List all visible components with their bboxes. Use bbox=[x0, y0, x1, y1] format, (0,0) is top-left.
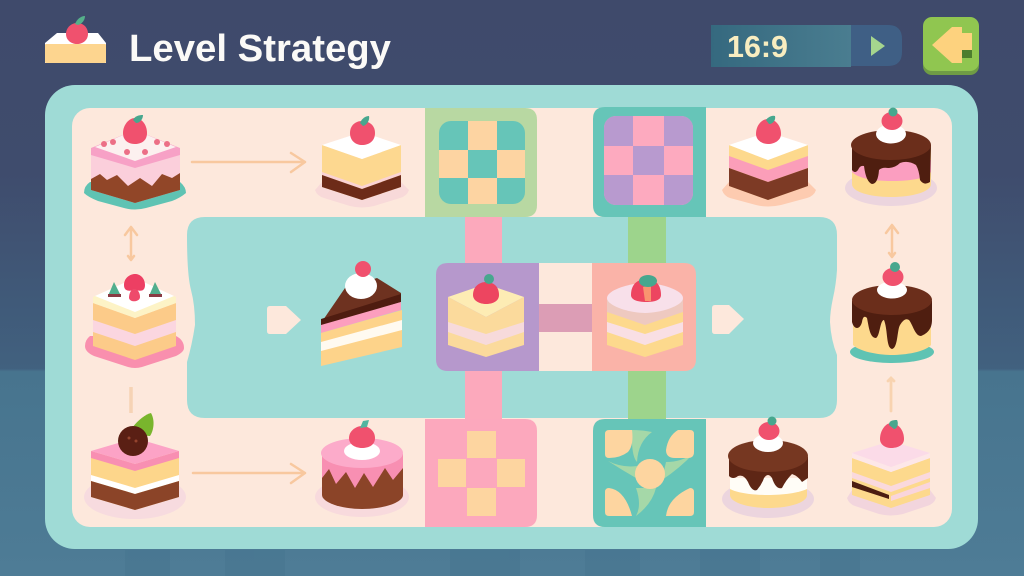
icon: arrow plug bbox=[932, 27, 972, 63]
cake: cream layered slice bbox=[847, 420, 936, 516]
tile: teal checker bbox=[425, 108, 537, 217]
center panel bbox=[187, 217, 837, 418]
cake: round chocolate drip on teal plate bbox=[850, 262, 934, 363]
badge text: 16:9 bbox=[727, 29, 788, 64]
arrow: top flow bbox=[192, 153, 305, 172]
back button bbox=[923, 17, 979, 75]
arrow: pentagon right 1 bbox=[267, 306, 301, 334]
aspect ratio badge bbox=[711, 25, 902, 67]
connector bars bbox=[465, 217, 666, 419]
cream path bbox=[72, 108, 952, 527]
arrow: bottom flow bbox=[193, 464, 305, 483]
cake: round chocolate drip bottom bbox=[722, 416, 814, 518]
arrow: pentagon right 2 bbox=[712, 305, 744, 334]
cake: center pink round layered bbox=[607, 275, 683, 357]
cake: round chocolate drip with pink bbox=[845, 108, 937, 206]
tile: leaf pattern bbox=[593, 419, 706, 527]
center middle connector bbox=[539, 263, 592, 371]
arrow: right double bottom bbox=[888, 378, 894, 411]
arrow: pentagon left 1 bbox=[544, 148, 576, 176]
icon: play triangle bbox=[871, 36, 885, 56]
cake: layered peach with pink plate bbox=[85, 274, 184, 368]
tile: pink cross bbox=[425, 419, 537, 527]
main board bbox=[45, 85, 978, 549]
header icon: cake logo bbox=[45, 16, 106, 63]
title: Level Strategy bbox=[129, 28, 391, 70]
cake: center chocolate slice bbox=[321, 261, 402, 366]
cake: round pink icing chocolate bbox=[315, 420, 409, 517]
arrow: left double bbox=[125, 227, 137, 260]
center purple tile bbox=[436, 263, 539, 371]
cake: pink square with brown base bbox=[84, 115, 186, 210]
cake: rainbow square bbox=[722, 116, 816, 206]
arrow: pentagon left 2 bbox=[544, 457, 576, 486]
cake: vanilla chocolate slice bbox=[315, 116, 409, 208]
tile: purple checker bbox=[593, 107, 706, 217]
cake: center vanilla square bbox=[448, 274, 524, 357]
arrow: right double top bbox=[886, 225, 898, 257]
center coral tile bbox=[592, 263, 696, 371]
cake: layered with berry and leaf bbox=[84, 413, 186, 519]
arrow: left stem bbox=[129, 387, 133, 413]
